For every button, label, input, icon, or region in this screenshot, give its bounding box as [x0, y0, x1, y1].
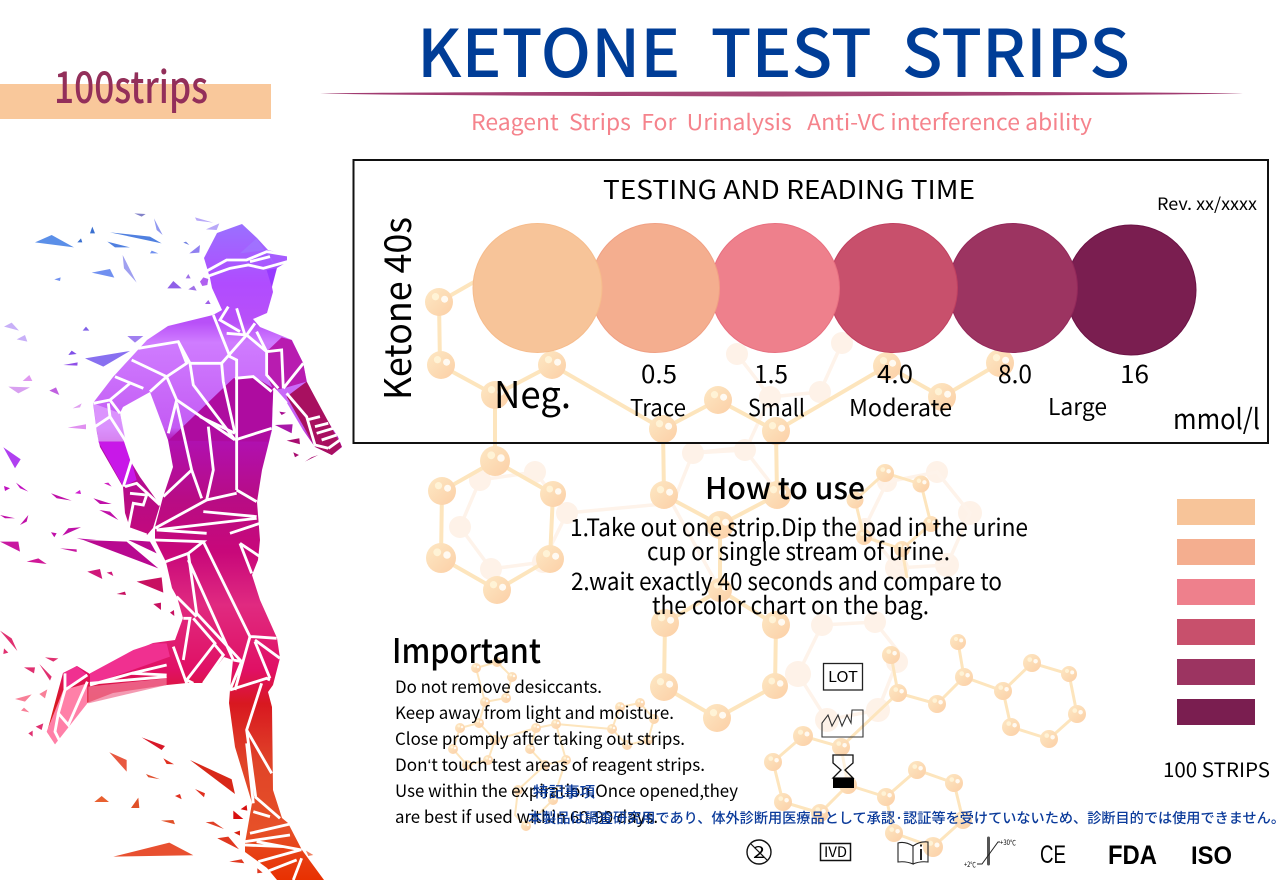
concentration values: 16: [1120, 355, 1149, 391]
section: how to use: [570, 464, 1028, 621]
colour chart circles: [473, 224, 1196, 355]
panel heading: TESTING AND READING TIME: [603, 170, 975, 207]
section: important: Keep away from light and moisture.: [395, 699, 674, 724]
section: important: [392, 624, 738, 828]
concentration values: 8.0: [998, 355, 1032, 391]
icon: do not reuse: 2: [753, 838, 765, 863]
japanese notice: 本製品は調査研究用であり、体外診断用医療品として承認·認証等を受けていないため、診断目的では使用できません。: [528, 808, 1280, 828]
section: how to use: 2.wait exactly 40 seconds and compare to: [571, 562, 1002, 597]
badge: 100strips: [0, 52, 271, 119]
result labels: Trace: [630, 389, 686, 423]
concentration values: 0.5: [641, 355, 677, 391]
facet cracks: upper body: [93, 252, 340, 535]
icon: CE: CE: [1040, 841, 1066, 869]
section: important: Important: [392, 624, 541, 673]
colour swatches: [1177, 499, 1255, 725]
icon: temperature range: [964, 838, 1016, 870]
background: solid molecule, centre: [425, 270, 1014, 732]
icon: manufacturer: [822, 710, 863, 737]
icon: IVD: IVD: [824, 842, 847, 862]
icon: temperature range: +2℃: [964, 860, 976, 870]
title: KETONE TEST STRIPS: [417, 1, 1130, 97]
section: important: Use within the expiration.Once opened,they: [395, 777, 738, 802]
section: how to use: the color chart on the bag.: [652, 586, 929, 621]
section: important: Close promply after taking out strips.: [395, 725, 685, 750]
concentration values: 4.0: [877, 355, 913, 391]
result labels: Small: [748, 389, 805, 423]
facet cracks: lower body: [55, 540, 302, 880]
section: how to use: 1.Take out one strip.Dip the pad in the urine: [570, 508, 1028, 543]
shaded facets: [93, 238, 342, 487]
fragments: lower: [0, 540, 313, 873]
strip count: 100 STRIPS: [1163, 754, 1270, 783]
title rule: [320, 92, 1243, 96]
concentration values: [641, 355, 1149, 391]
icon: LOT: [824, 664, 862, 690]
japanese notice: [528, 781, 1280, 828]
background: small molecule behind Important: [448, 657, 659, 831]
icon: temperature range: +30℃: [1000, 838, 1016, 848]
revision note: Rev. xx/xxxx: [1157, 190, 1258, 215]
vertical label: Ketone 40s: [368, 217, 422, 400]
result labels: [494, 365, 1107, 423]
badge: 100strips: 100strips: [54, 52, 208, 116]
unit: mmol/l: [1173, 398, 1260, 438]
concentration values: 1.5: [754, 355, 788, 391]
result labels: Large: [1048, 388, 1107, 422]
section: how to use: How to use: [705, 464, 865, 508]
icon: FDA: FDA: [1108, 840, 1157, 870]
section: important: Don‘t touch test areas of reagent strips.: [395, 751, 705, 776]
icon: do not reuse: [747, 838, 771, 864]
subtitle: Reagent Strips For Urinalysis Anti-VC interference ability: [471, 105, 1093, 137]
japanese notice: 特記事項: [533, 781, 595, 802]
background: solid molecule, right: [764, 464, 1086, 857]
panel: testing and reading time: [354, 160, 1268, 443]
icon: instructions book: [898, 842, 928, 864]
icon: LOT: LOT: [828, 666, 858, 687]
result labels: Moderate: [849, 389, 952, 423]
illustration: shattered runner: [0, 213, 342, 880]
fragments: upper: [0, 213, 318, 540]
runner silhouette: [47, 224, 342, 880]
section: important: are best if used within 60-90 days.: [395, 803, 658, 828]
section: important: Do not remove desiccants.: [395, 673, 602, 698]
result labels: Neg.: [494, 365, 571, 419]
section: how to use: cup or single stream of urine.: [647, 532, 950, 567]
icon: ISO: ISO: [1191, 842, 1232, 870]
background: faint molecule: [449, 332, 982, 732]
icon: expiry hourglass: [833, 755, 854, 788]
